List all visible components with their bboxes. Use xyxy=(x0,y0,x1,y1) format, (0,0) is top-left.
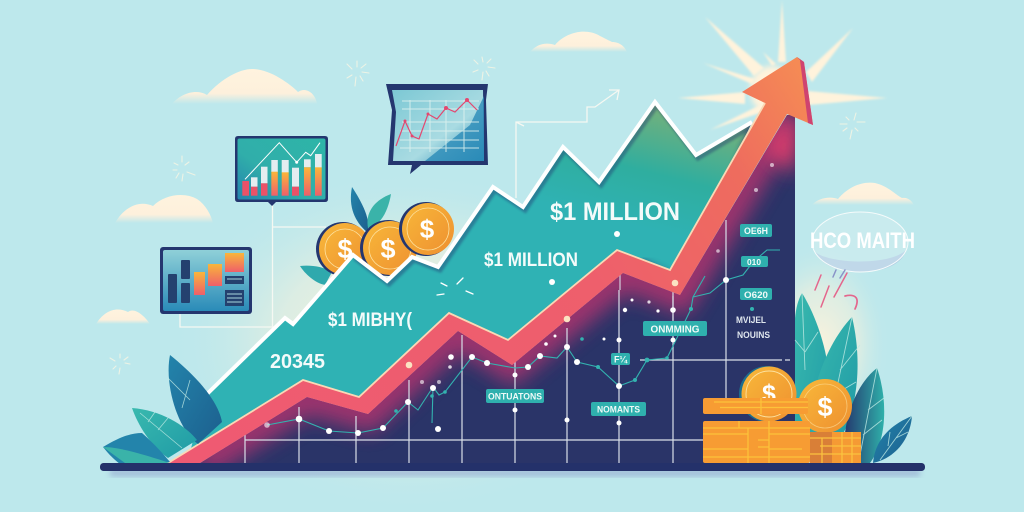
mountain labels: $1 MILLION xyxy=(484,250,578,271)
thought bubble with label xyxy=(810,212,915,272)
coins beside gold bars: $ xyxy=(817,392,833,422)
teal mountain chart area xyxy=(190,102,765,452)
leaves behind coins xyxy=(300,187,391,285)
panel: bar and line chart xyxy=(235,136,328,206)
rain strokes xyxy=(815,270,857,309)
chart tags: ONMMING xyxy=(650,324,700,336)
chart tags: ONTUATONS xyxy=(488,392,542,402)
mountain labels: $1 MIBHY( xyxy=(328,310,413,331)
thought bubble with label: HCO MAITH xyxy=(810,228,915,253)
red growth arrow xyxy=(168,57,813,463)
mountain labels: $1 MILLION xyxy=(550,198,680,226)
mountain labels xyxy=(270,198,680,373)
white dots and burst on mountain xyxy=(437,231,620,295)
line chart on dark area xyxy=(264,163,780,436)
coins beside gold bars: $ xyxy=(762,380,776,408)
panel: line chart speech bubble xyxy=(386,84,488,174)
connector lines xyxy=(180,90,619,328)
dark chart area xyxy=(200,110,795,463)
coins on the peaks: $ xyxy=(380,234,396,264)
coins on the peaks: $ xyxy=(420,214,435,244)
side tags: 010 xyxy=(747,257,761,267)
chart grid lines xyxy=(245,220,790,463)
leaves: left cluster xyxy=(103,355,222,464)
sparkle marks xyxy=(110,57,865,374)
chart tags: NOMANTS xyxy=(597,404,640,416)
leaves: right cluster xyxy=(795,293,912,463)
side tags: NOUINS xyxy=(737,330,770,341)
side tags xyxy=(736,224,772,341)
chart tags: F¼ xyxy=(614,354,628,364)
chart tags xyxy=(486,321,707,416)
side tags: OE6H xyxy=(744,226,768,236)
mountain labels: 20345 xyxy=(270,351,325,373)
side tags: O620 xyxy=(744,290,768,300)
gold bar stack xyxy=(703,398,861,463)
base shadow xyxy=(110,470,920,476)
sunburst xyxy=(678,0,887,130)
ground line xyxy=(100,463,925,471)
coins on the peaks xyxy=(316,202,454,276)
side tags: MVIJEL xyxy=(736,315,766,326)
coins on the peaks: $ xyxy=(337,234,353,264)
clouds xyxy=(96,32,914,324)
panel: blocks dashboard xyxy=(160,247,252,314)
coins beside gold bars xyxy=(739,366,852,433)
